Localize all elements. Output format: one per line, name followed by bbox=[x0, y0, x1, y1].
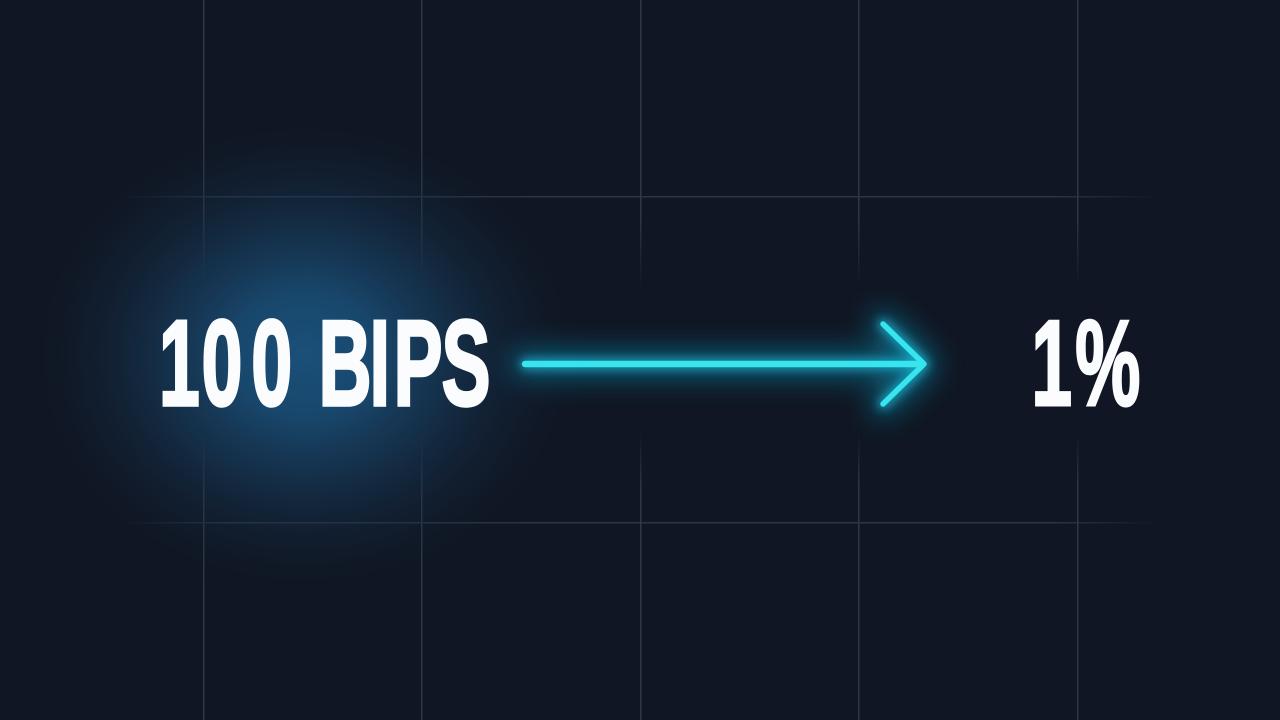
arrow bbox=[525, 324, 924, 404]
label: 100 BIPS: 100 BIPS bbox=[159, 296, 490, 432]
blue glow behind label bbox=[15, 105, 595, 605]
label: 1%: 1% bbox=[1031, 296, 1140, 432]
